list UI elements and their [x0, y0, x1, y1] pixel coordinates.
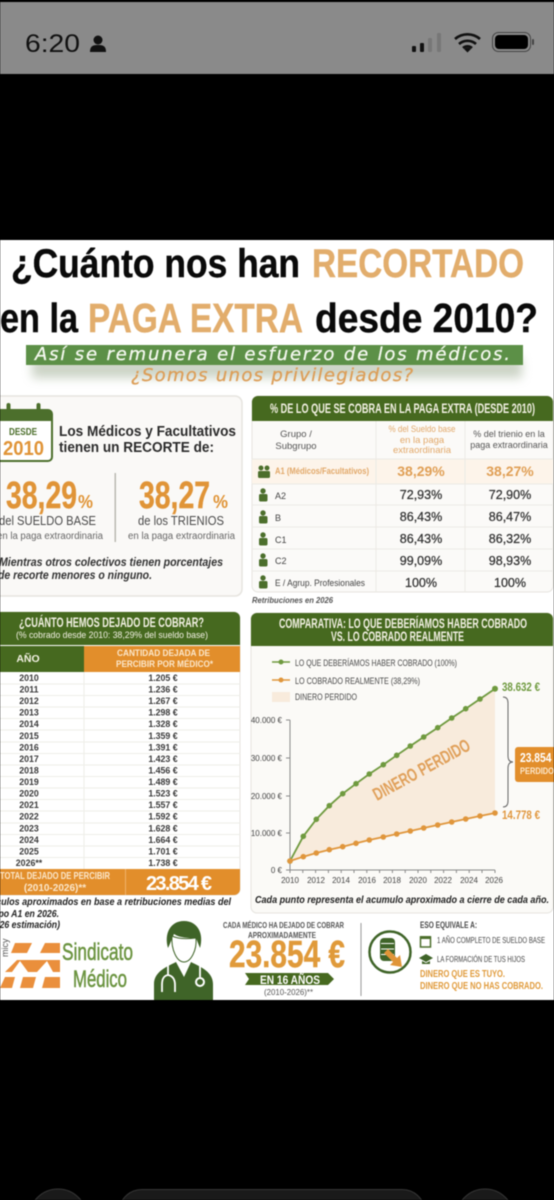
icon: graduation cap: [419, 954, 433, 964]
table rows: 1.628 €: [148, 823, 178, 833]
column headers: [275, 424, 548, 456]
table rows: 1.205 €: [148, 673, 178, 683]
panel heading: (% cobrado desde 2010: 38,29% del sueldo base): [16, 630, 208, 641]
bracket: [503, 697, 513, 807]
axis labels: 2020: [409, 876, 427, 885]
legend: LO COBRADO REALMENTE (38,29%): [295, 676, 420, 686]
title: [0, 242, 538, 341]
table rows: 2013: [19, 708, 39, 718]
table rows: 1.701 €: [148, 846, 178, 856]
panel heading: [16, 615, 208, 641]
icon: calendar desde 2010: [0, 403, 52, 461]
area label: DINERO PERDIDO: [369, 735, 474, 805]
row: B: B: [275, 513, 281, 523]
stat: sueldo base: en la paga extraordinaria: [0, 531, 103, 542]
subtitle banner: ¿Somos unos privilegiados?: [131, 365, 413, 386]
column header: cantidad: PERCIBIR POR MÉDICO*: [116, 659, 213, 670]
white infographic sheet: [0, 240, 554, 1000]
column headers: en la paga: [400, 435, 445, 446]
axis labels: 20.000 €: [251, 792, 283, 801]
row: C2: 98,93%: [489, 554, 531, 568]
block: total por medico: CADA MÉDICO HA DEJADO DE COBRAR: [223, 920, 344, 930]
block: total por medico: [223, 920, 345, 997]
stat: trienios: de los TRIENIOS: [138, 513, 224, 528]
row: E: 100%: [494, 576, 526, 590]
table rows: 1.298 €: [148, 708, 178, 718]
row: E: E / Agrup. Profesionales: [275, 578, 365, 588]
table rows: 2017: [19, 754, 39, 764]
title: desde 2010?: [315, 295, 538, 341]
lost money area: [290, 689, 495, 861]
legend: LO QUE DEBERÍAMOS HABER COBRADO (100%): [295, 658, 457, 668]
footnote: [0, 896, 232, 931]
stat: trienios: [128, 475, 235, 542]
table rows: 1.523 €: [148, 789, 178, 799]
icon: calendar desde 2010: 2010: [3, 438, 44, 460]
icon: coins: [370, 932, 410, 972]
axis labels: 2022: [434, 876, 452, 885]
total row: TOTAL DEJADO DE PERCIBIR: [0, 871, 111, 882]
block: eso equivale a: ESO EQUIVALE A:: [420, 920, 477, 930]
stat: sueldo base: del SUELDO BASE: [0, 513, 96, 528]
table rows: 1.738 €: [148, 858, 178, 868]
logo: sindicato medico: [0, 938, 133, 993]
recorte heading: [59, 424, 236, 456]
axis labels: 40.000 €: [251, 716, 283, 725]
table rows: 1.391 €: [148, 742, 178, 752]
row: A2: 72,93%: [400, 488, 442, 502]
axis labels: 2018: [383, 876, 401, 885]
row: E: 100%: [405, 576, 437, 590]
panel: comparativa chart: 14.778 €: [502, 808, 540, 822]
table rows: 2016: [19, 742, 39, 752]
column headers: % del Sueldo base: [388, 424, 456, 435]
axis labels: 0 €: [271, 866, 283, 875]
bottom phone navigation: [29, 1189, 514, 1200]
block: eso equivale a: [419, 920, 545, 992]
row: C2: [259, 553, 531, 568]
table rows: 1.456 €: [148, 766, 178, 776]
column headers: extraordinaria: [393, 445, 452, 456]
axis labels: 2014: [332, 876, 350, 885]
row: A1: [258, 463, 534, 479]
total row: (2010-2026)**: [24, 883, 86, 894]
table rows: 1.359 €: [148, 731, 178, 741]
stat: trienios: %: [213, 492, 228, 512]
panel: cuanto hemos dejado de cobrar: [0, 612, 240, 895]
title: PAGA EXTRA: [88, 295, 303, 341]
stat: trienios: en la paga extraordinaria: [128, 531, 235, 542]
stat: trienios: 38,27: [139, 475, 210, 517]
panel: recorte: [0, 396, 242, 596]
column headers: % del trienio en la: [473, 429, 545, 439]
block: eso equivale a: DINERO QUE ES TUYO.: [420, 968, 505, 980]
column headers: Grupo /: [280, 429, 312, 440]
table rows: 2020: [19, 789, 39, 799]
row: C2: 99,09%: [400, 554, 442, 568]
block: total por medico: APROXIMADAMENTE: [248, 930, 316, 940]
table rows: 2019: [19, 777, 39, 787]
axis labels: 2010: [281, 876, 299, 885]
note: [0, 557, 223, 582]
block: total por medico: (2010-2026)**: [264, 988, 313, 997]
table rows: 2015: [19, 731, 39, 741]
row: B: 86,47%: [489, 510, 531, 524]
row: B: 86,43%: [400, 510, 442, 524]
row: C1: [259, 532, 531, 546]
table rows: 2021: [19, 800, 39, 810]
table rows: 2010: [19, 673, 39, 683]
stat: sueldo base: 38,29: [6, 475, 77, 517]
title: en la: [0, 295, 79, 341]
table rows: 1.664 €: [148, 835, 178, 845]
row: A1: 38,29%: [397, 463, 445, 479]
table rows: 2023: [19, 823, 39, 833]
table rows: 1.423 €: [148, 754, 178, 764]
table rows: 2011: [19, 685, 39, 695]
row: C1: 86,32%: [489, 532, 531, 546]
block: total por medico: 23.854 €: [229, 934, 345, 976]
logo: sindicato medico: micy: [0, 938, 10, 957]
table rows: 2026**: [16, 858, 43, 868]
axis labels: 10.000 €: [251, 829, 283, 838]
axis labels: 2026: [485, 876, 503, 885]
row: B: [259, 510, 531, 524]
table rows: 1.267 €: [148, 696, 178, 706]
axis labels: [251, 716, 503, 885]
stat: sueldo base: [0, 475, 103, 542]
row: A1: A1 (Médicos/Facultativos): [275, 466, 369, 476]
panel: comparativa chart: [251, 613, 554, 913]
total row: 23.854 €: [146, 873, 212, 895]
table rows: 1.557 €: [148, 800, 178, 810]
panel heading: ¿CUÁNTO HEMOS DEJADO DE COBRAR?: [19, 615, 204, 630]
value labels: 38.632 €: [502, 680, 540, 694]
column headers: paga extraordinaria: [470, 440, 548, 450]
axis labels: 2012: [307, 876, 325, 885]
chart heading: VS. LO COBRADO REALMENTE: [331, 629, 464, 644]
row: A2: [259, 488, 531, 502]
row: C1: 86,43%: [400, 532, 442, 546]
subtitle banner: [26, 344, 523, 386]
column header: cantidad: [84, 646, 240, 672]
row: C1: C1: [275, 535, 287, 545]
column header: año: AÑO: [16, 652, 40, 665]
line: deberiamos haber cobrado: [287, 686, 498, 864]
icon: doctor: [154, 921, 213, 1000]
row: A2: 72,90%: [489, 488, 531, 502]
legend: DINERO PERDIDO: [295, 692, 357, 702]
table rows: 2014: [19, 719, 39, 729]
row: C2: C2: [275, 556, 287, 566]
row: E: [259, 575, 526, 590]
axis labels: 30.000 €: [251, 754, 283, 763]
column header: año: [0, 646, 84, 672]
row: A1: 38,27%: [486, 463, 534, 479]
logo: sindicato medico: Médico: [73, 966, 127, 993]
total row: [0, 869, 240, 895]
table rows: 1.489 €: [148, 777, 178, 787]
icon: calendar desde 2010: DESDE: [9, 426, 37, 438]
table rows: [16, 673, 178, 868]
axis labels: 2024: [460, 876, 478, 885]
callout: perdido: [515, 747, 554, 782]
ribbon: EN 16 AÑOS: [260, 974, 320, 987]
stat: sueldo base: %: [78, 492, 93, 512]
subtitle banner: Así se remunera el esfuerzo de los médicos.: [34, 344, 510, 365]
table rows: 1.236 €: [148, 685, 178, 695]
table rows: 2012: [19, 696, 39, 706]
table footnote: Retribuciones en 2026: [252, 595, 333, 605]
table rows: 1.328 €: [148, 719, 178, 729]
phone status bar: [0, 2, 554, 74]
table rows: 2022: [19, 812, 39, 822]
legend: [272, 658, 457, 702]
icon: calendar: [420, 936, 431, 947]
logo: sindicato medico: Sindicato: [62, 939, 133, 966]
title: ¿Cuánto nos han: [11, 242, 300, 286]
chart heading: [279, 616, 527, 644]
table rows: 2018: [19, 766, 39, 776]
line: cobrado realmente: [287, 810, 498, 864]
panel: porcentaje table: [252, 396, 553, 592]
recorte heading: Los Médicos y Facultativos: [59, 424, 236, 440]
table rows: 2025: [19, 846, 39, 856]
table rows: 1.592 €: [148, 812, 178, 822]
axes: [286, 720, 495, 873]
note: de recorte menores o ninguno.: [0, 570, 152, 582]
column header: cantidad: CANTIDAD DEJADA DE: [117, 648, 210, 659]
note: Mientras otros colectivos tienen porcentajes: [0, 557, 223, 569]
recorte heading: tienen un RECORTE de:: [59, 440, 214, 456]
row: A2: A2: [275, 491, 286, 501]
axis labels: 2016: [358, 876, 376, 885]
phone status bar: 6:20: [25, 30, 80, 58]
column headers: Subgrupo: [275, 441, 317, 452]
table rows: 2024: [19, 835, 39, 845]
